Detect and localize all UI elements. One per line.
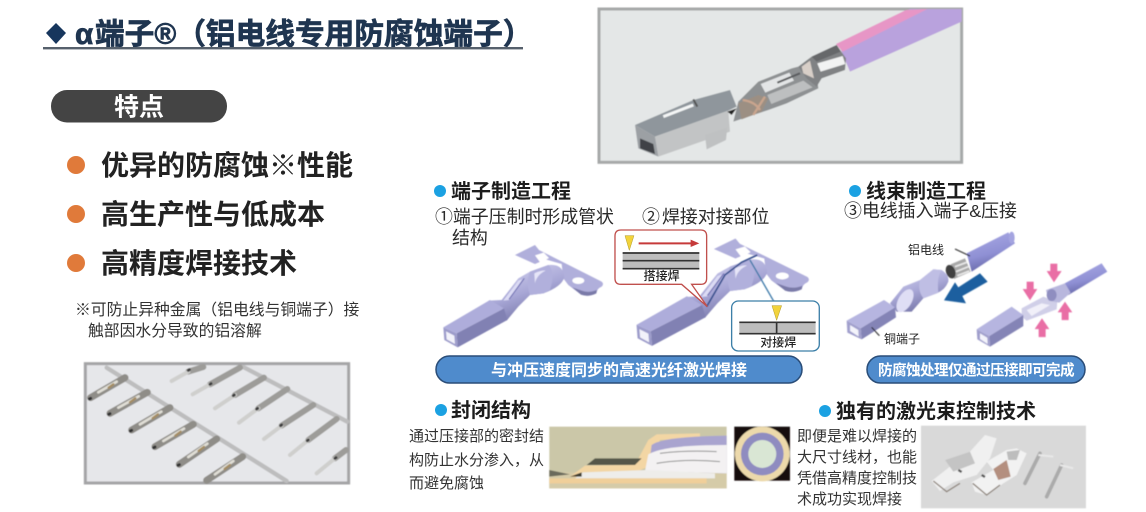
heading: harness process: 线束制造工程 <box>866 180 986 203</box>
callout: lap weld <box>615 230 707 307</box>
heading: terminal process: 端子制造工程 <box>451 180 571 203</box>
footnote: ※可防止异种金属（铝电线与铜端子）接 <box>75 302 359 319</box>
laser beam control text: 大尺寸线材，也能 <box>797 449 917 466</box>
banner: crimp only: 防腐蚀处理仅通过压接即可完成 <box>878 361 1075 379</box>
step 2 text: 焊接对接部位 <box>662 207 769 227</box>
panel: sealed structure <box>409 399 790 492</box>
features pill heading <box>51 90 227 122</box>
feature 1: 优异的防腐蚀※性能 <box>101 150 353 181</box>
heading: laser beam control: 独有的激光束控制技术 <box>836 400 1036 423</box>
panel: laser beam control <box>797 400 1086 508</box>
aluminium wire <box>944 232 1015 280</box>
feature 3: 高精度焊接技术 <box>101 248 297 279</box>
panel: terminal manufacturing process <box>434 180 819 383</box>
title text: α <box>75 18 93 51</box>
banner: crimp only <box>867 356 1085 383</box>
step 1 text: 结构 <box>452 228 488 248</box>
laser beam control text: 即便是难以焊接的 <box>797 428 917 445</box>
label: aluminium wire: 铝电线 <box>908 242 944 257</box>
arrows: crimp force <box>1023 264 1072 337</box>
step 1 text: ①端子压制时形成管状 <box>435 207 614 227</box>
label: copper terminal: 铜端子 <box>884 331 920 346</box>
title text: ®（铝电线专用防腐蚀端子） <box>154 18 532 51</box>
photo: cross section <box>734 427 790 481</box>
photo: terminal strip <box>85 364 349 483</box>
panel: wire harness manufacturing process <box>844 180 1107 383</box>
crimped terminal <box>977 263 1107 347</box>
banner: synchronized laser welding: 与冲压速度同步的高速光纤激光焊接 <box>491 360 747 380</box>
sealed structure text: 构防止水分渗入，从 <box>409 452 544 469</box>
laser beam control text: 术成功实现焊接 <box>797 491 902 508</box>
step 3 text: ③电线插入端子&压接 <box>844 201 1017 221</box>
features pill heading: 特点 <box>114 94 164 122</box>
panel: features <box>51 90 360 340</box>
footnote: 触部因水分导致的铝溶解 <box>88 322 262 340</box>
open copper terminal <box>847 269 948 339</box>
photo: large terminals <box>921 426 1086 508</box>
diagram: terminal step 1 <box>443 245 603 347</box>
callout: butt weld <box>732 301 819 351</box>
step 2 text: ② <box>642 207 660 227</box>
sealed structure text: 而避免腐蚀 <box>409 474 484 492</box>
photo: longitudinal section <box>549 427 727 488</box>
photo: crimped wire terminal <box>599 9 962 162</box>
sealed structure text: 通过压接部的密封结 <box>409 428 544 445</box>
arrow: insertion <box>944 273 988 303</box>
banner: synchronized laser welding <box>436 356 802 383</box>
laser beam control text: 凭借高精度控制技 <box>797 470 917 487</box>
title text: 端子 <box>95 18 154 51</box>
diagram: insertion and crimp <box>847 232 1107 347</box>
feature 2: 高生产性与低成本 <box>101 199 325 230</box>
title <box>43 18 532 51</box>
icon: title diamond <box>46 23 66 44</box>
heading: sealed structure: 封闭结构 <box>451 399 531 422</box>
callout: butt weld: 对接焊 <box>760 335 796 350</box>
diagram: terminal step 2 with welds <box>615 230 819 351</box>
callout: lap weld: 搭接焊 <box>644 268 680 283</box>
